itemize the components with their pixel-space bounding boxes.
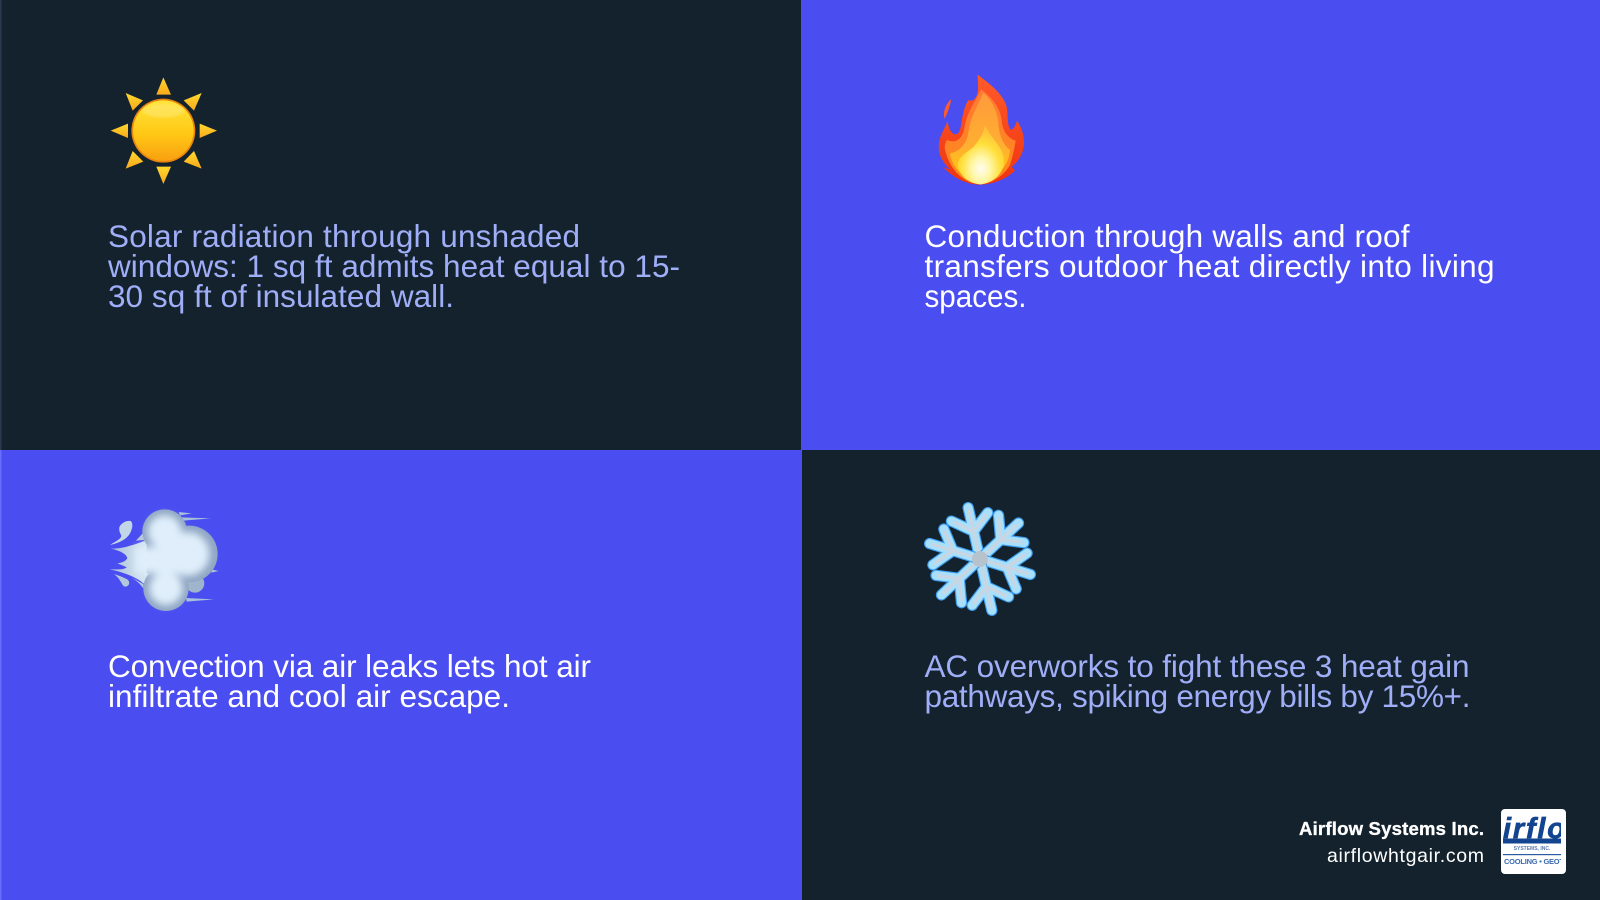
text: AC overwork: pathways, spiking energy bills by 15%+.	[924, 678, 1470, 714]
icon: fire	[939, 75, 1024, 185]
text: solar radiation: 30 sq ft of insulated wall.	[108, 278, 454, 314]
logo: irflo	[1503, 813, 1565, 845]
text: convection: Convection via air leaks lets hot air	[108, 648, 591, 684]
icon: snowflake	[924, 504, 1036, 614]
text: AC overwork: AC overworks to fight these 3 heat gain	[924, 648, 1470, 684]
icon: wind cloud	[109, 509, 219, 611]
text: AC overwork	[924, 648, 1470, 714]
panel: AC overwork	[802, 450, 1600, 900]
text: solar radiation	[107, 218, 680, 314]
brand: company name and site	[1299, 818, 1484, 867]
text: solar radiation: windows: 1 sq ft admits heat equal to 15-	[107, 248, 680, 284]
icon: sun	[111, 77, 217, 184]
text: convection	[108, 648, 591, 714]
logo	[1501, 809, 1566, 874]
text: conduction: Conduction through walls and roof	[924, 218, 1410, 254]
text: conduction: spaces.	[924, 278, 1026, 314]
text: conduction: transfers outdoor heat directly into living	[924, 248, 1494, 284]
text: solar radiation: Solar radiation through unshaded	[108, 218, 580, 254]
panel: solar radiation	[0, 0, 801, 450]
logo: COOLING • GEOT	[1504, 857, 1564, 866]
brand: company name and site: airflowhtgair.com	[1327, 845, 1484, 867]
panel: convection	[0, 450, 802, 900]
brand: company name and site: Airflow Systems Inc.	[1299, 818, 1484, 839]
text: convection: infiltrate and cool air escape.	[108, 678, 510, 714]
logo: SYSTEMS, INC.	[1514, 846, 1551, 852]
panel: conduction	[801, 0, 1600, 450]
text: conduction	[924, 218, 1494, 314]
